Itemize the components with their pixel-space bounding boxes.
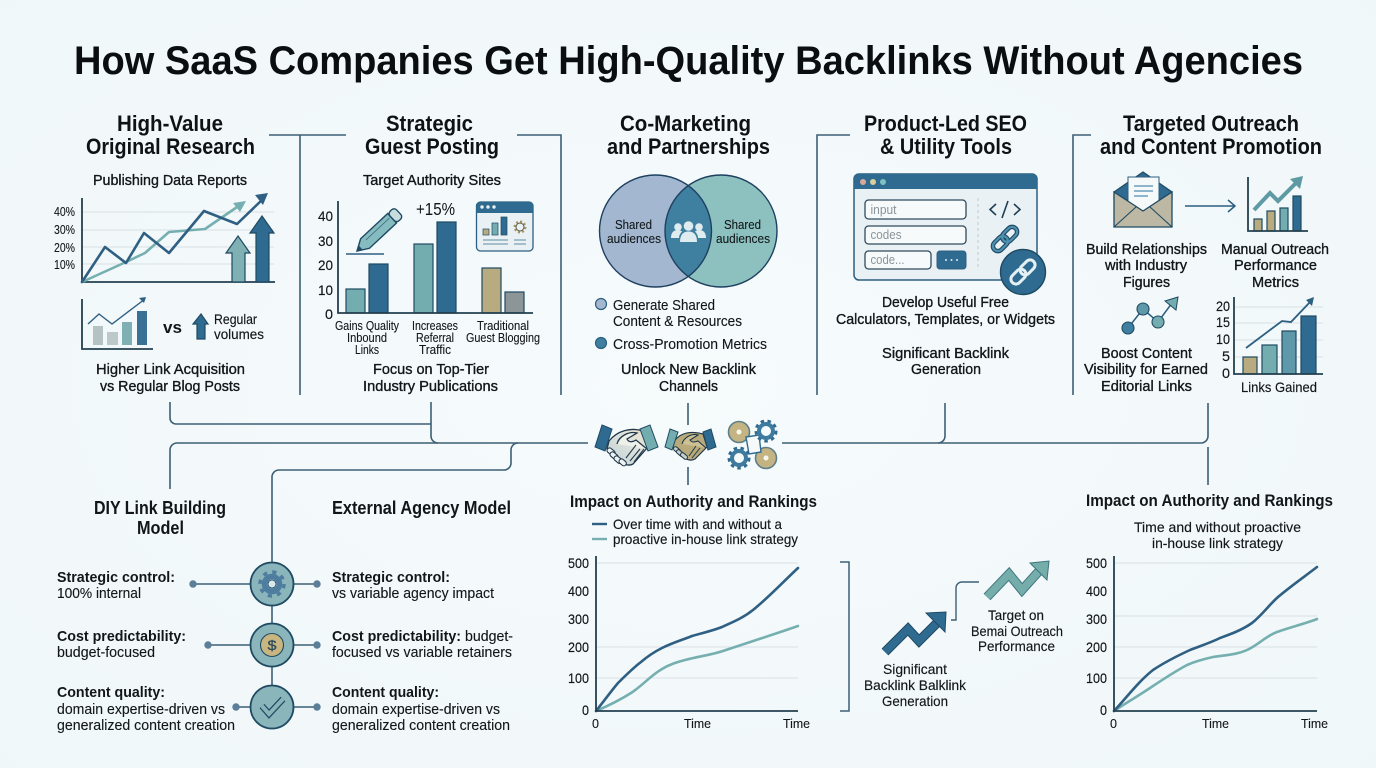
text: boost content: Boost Content	[1101, 345, 1193, 362]
icon: dark zigzag arrow	[885, 612, 946, 652]
diy: cost predictability: budget-focused	[57, 644, 155, 661]
line chart: 100	[568, 670, 589, 686]
text: significant generation: Backlink Balklink	[864, 677, 967, 693]
line chart: 100	[1086, 670, 1107, 686]
panel: diy vs agency comparison	[57, 497, 513, 734]
subheading: in-house link strategy	[1152, 535, 1283, 551]
agency: cost predictability: focused vs variable retainers	[332, 644, 512, 661]
heading: Original Research	[86, 134, 255, 159]
venn diagram: shared audiences: Shared	[615, 217, 652, 232]
caption: Higher Link Acquisition	[96, 361, 245, 378]
agency: content quality: domain expertise-driven vs	[332, 701, 500, 718]
agency: cost predictability: Cost predictability:	[332, 628, 461, 645]
diy: cost predictability: Cost predictability:	[57, 628, 186, 645]
text: build relationships	[1086, 241, 1207, 291]
venn diagram: shared audiences: audiences	[607, 231, 661, 246]
icon: dollar node	[250, 624, 294, 666]
venn diagram: shared audiences: audiences	[716, 231, 770, 246]
line chart: 400	[1086, 583, 1107, 599]
comparison chart: vs regular volumes: volumes	[214, 326, 264, 342]
heading: agency model: External Agency Model	[332, 497, 511, 518]
panel: high-value original research	[54, 111, 275, 395]
legend: proactive in-house link strategy	[613, 531, 798, 547]
icon: large handshake	[595, 425, 658, 467]
chart: links gained: 10	[1216, 331, 1230, 347]
text: target on outreach: Target on	[988, 607, 1044, 623]
connector lines	[170, 402, 1208, 562]
bar chart: guest posting: +15%	[416, 199, 455, 219]
icon: small handshake	[665, 429, 716, 460]
text: significant generation: Significant	[883, 661, 947, 677]
heading: Co-Marketing	[620, 111, 751, 136]
line chart: 200	[1086, 639, 1107, 655]
chart: links gained: 20	[1216, 298, 1230, 314]
heading	[365, 111, 499, 159]
chart: links gained: Links Gained	[1241, 379, 1317, 395]
caption: Channels	[659, 378, 718, 395]
chart: links gained: 15	[1216, 314, 1230, 330]
subheading	[1134, 519, 1301, 551]
diy: content quality	[57, 684, 235, 734]
text: target on outreach: Performance	[978, 638, 1055, 654]
text: outreach metrics: Metrics	[1252, 274, 1299, 291]
line chart: 300	[1086, 611, 1107, 627]
caption: vs Regular Blog Posts	[100, 378, 240, 395]
icon: envelope	[1114, 172, 1172, 227]
icon: tool window: codes	[870, 228, 902, 242]
diy: content quality: generalized content creation	[57, 717, 235, 734]
text: boost content	[1084, 345, 1208, 395]
diy: strategic control	[57, 569, 175, 602]
text: outreach metrics: Manual Outreach	[1221, 241, 1329, 258]
bar chart: guest posting: Gains Quality	[335, 319, 400, 333]
chart: links gained: 0	[1222, 365, 1230, 381]
caption: Unlock New Backlink	[621, 361, 756, 378]
panel: product-led seo and utility tools	[836, 111, 1055, 378]
icon: dashboard window	[476, 202, 533, 251]
line chart: Time	[1202, 717, 1229, 731]
chart: links gained	[1216, 297, 1323, 395]
heading: High-Value	[117, 111, 223, 136]
line chart: 500	[568, 555, 589, 571]
heading: Impact on Authority and Rankings	[570, 492, 817, 511]
divider: column 3 to 4	[817, 135, 850, 395]
diy: content quality: domain expertise-driven vs	[57, 701, 225, 718]
caption	[363, 361, 498, 395]
legend: shared content: Content & Resources	[613, 313, 742, 330]
line chart: data reports: 40%	[54, 205, 75, 219]
line chart: Time	[684, 717, 711, 731]
heading	[86, 111, 255, 159]
arrow: outreach to metrics	[1185, 200, 1235, 212]
heading: diy model	[94, 497, 226, 538]
subheading: Target Authority Sites	[363, 172, 501, 189]
line chart: Time	[783, 717, 810, 731]
bar chart: guest posting: Inbound	[347, 331, 387, 345]
text: target on outreach	[971, 607, 1063, 654]
agency: strategic control: Strategic control:	[332, 569, 450, 586]
subheading: Publishing Data Reports	[93, 172, 247, 189]
text: target on outreach: Bemai Outreach	[971, 623, 1063, 639]
connector	[951, 582, 979, 620]
heading: & Utility Tools	[880, 134, 1012, 159]
line chart: 500	[1086, 555, 1107, 571]
line chart: 0	[582, 702, 589, 718]
bar chart: guest posting: Increases	[412, 319, 458, 333]
text: build relationships: Build Relationships	[1086, 241, 1207, 258]
text: significant generation: Generation	[882, 693, 948, 709]
icon: tool window: input	[870, 203, 897, 217]
divider: column 2 to 3	[517, 135, 561, 395]
chart: links gained: 5	[1222, 348, 1230, 364]
line chart: 400	[568, 583, 589, 599]
bar chart: guest posting: Referral	[416, 331, 454, 345]
title: How SaaS Companies Get High-Quality Backlinks Without Agencies	[74, 39, 1303, 83]
heading: diy model: DIY Link Building	[94, 497, 226, 518]
venn diagram: shared audiences	[600, 175, 777, 287]
bar chart: guest posting: Guest Blogging	[466, 331, 540, 345]
line chart: data reports: 30%	[54, 223, 75, 237]
venn diagram: shared audiences: Shared	[724, 217, 761, 232]
agency: content quality: generalized content creation	[332, 717, 510, 734]
caption: Calculators, Templates, or Widgets	[836, 311, 1055, 328]
caption	[836, 294, 1055, 328]
text: build relationships: with Industry	[1104, 257, 1187, 274]
agency: content quality	[332, 684, 510, 734]
legend: cross-promotion: Cross-Promotion Metrics	[613, 336, 767, 353]
diy: strategic control: 100% internal	[57, 585, 141, 602]
bar chart: guest posting: Links	[355, 343, 379, 357]
line chart: data reports	[54, 193, 275, 282]
heading: diy model: Model	[137, 517, 184, 538]
line chart: data reports: 10%	[54, 258, 75, 272]
caption: Focus on Top-Tier	[373, 361, 489, 378]
caption: Develop Useful Free	[882, 294, 1009, 311]
bar chart: guest posting: 40	[318, 208, 333, 224]
bar chart: guest posting: 20	[318, 257, 333, 273]
panel: impact chart right	[1086, 491, 1333, 731]
bar chart: guest posting: Traffic	[419, 343, 451, 357]
divider: column 1 to 2	[269, 135, 346, 395]
agency: cost predictability: budget-	[465, 628, 513, 645]
caption: Generation	[911, 361, 981, 378]
icon: gears and links	[728, 421, 776, 468]
heading: and Content Promotion	[1100, 134, 1322, 159]
line chart: 200	[568, 639, 589, 655]
legend: shared content: Generate Shared	[613, 297, 715, 314]
icon: tool window	[854, 174, 1046, 294]
bar chart: guest posting: Traditional	[477, 319, 529, 333]
subheading: Time and without proactive	[1134, 519, 1301, 535]
icon: network growth	[1122, 297, 1178, 334]
legend: shared content	[596, 297, 742, 330]
text: build relationships: Figures	[1123, 274, 1170, 291]
comparison chart: vs regular volumes: Regular	[214, 311, 257, 327]
icon: teal zigzag arrow	[987, 561, 1049, 597]
heading	[1100, 111, 1322, 159]
diy: strategic control: Strategic control:	[57, 569, 175, 586]
line chart: 0	[592, 717, 599, 731]
icon: people	[671, 221, 706, 242]
icon: dollar node: $	[268, 637, 277, 653]
bracket	[840, 562, 849, 711]
chart: manual outreach	[1248, 176, 1308, 231]
caption	[882, 345, 1009, 378]
icon: pencil	[346, 207, 403, 256]
icon: gear node	[250, 562, 294, 606]
heading: Strategic	[386, 111, 473, 136]
panel: impact chart center	[568, 492, 817, 731]
agency: strategic control	[332, 569, 495, 602]
diy: content quality: Content quality:	[57, 684, 165, 701]
bar chart: guest posting	[318, 199, 540, 357]
line chart	[1086, 555, 1328, 731]
legend	[592, 516, 798, 547]
divider: column 4 to 5	[1073, 135, 1091, 395]
heading: and Partnerships	[607, 134, 770, 159]
bar chart: guest posting: 10	[318, 282, 333, 298]
caption	[96, 361, 245, 395]
text: boost content: Visibility for Earned	[1084, 361, 1208, 378]
panel: co-marketing and partnerships	[596, 111, 777, 395]
heading: Impact on Authority and Rankings	[1086, 491, 1333, 510]
heading	[607, 111, 770, 159]
agency: content quality: Content quality:	[332, 684, 439, 701]
text: outreach metrics: Performance	[1234, 257, 1317, 274]
panel: targeted outreach and content promotion	[1084, 111, 1329, 395]
icon: check node	[250, 686, 294, 728]
line chart: 300	[568, 611, 589, 627]
caption: Significant Backlink	[882, 345, 1009, 362]
bar chart: guest posting: 30	[318, 233, 333, 249]
diy: cost predictability	[57, 628, 186, 661]
callout: backlink generation and outreach	[864, 561, 1063, 709]
line chart: 0	[1100, 702, 1107, 718]
text: boost content: Editorial Links	[1101, 378, 1192, 395]
heading: Guest Posting	[365, 134, 499, 159]
line chart: 0	[1110, 717, 1117, 731]
text: significant generation	[864, 661, 967, 709]
comparison chart: vs regular volumes	[82, 297, 264, 349]
agency: strategic control: vs variable agency impact	[332, 585, 495, 602]
caption	[621, 361, 756, 395]
line chart	[568, 555, 810, 731]
bar chart: guest posting: 0	[325, 306, 333, 322]
agency: cost predictability	[332, 628, 513, 661]
legend: Over time with and without a	[613, 516, 782, 532]
caption: Industry Publications	[363, 378, 498, 395]
line chart: Time	[1301, 717, 1328, 731]
heading: Product-Led SEO	[864, 111, 1027, 136]
heading	[864, 111, 1027, 159]
comparison chart: vs regular volumes: vs	[163, 318, 182, 337]
spine with nodes	[189, 562, 321, 728]
line chart: data reports: 20%	[54, 241, 75, 255]
panel: strategic guest posting	[318, 111, 540, 395]
heading: Targeted Outreach	[1123, 111, 1299, 136]
icon: tool window: code...	[870, 253, 904, 267]
text: outreach metrics	[1221, 241, 1329, 291]
